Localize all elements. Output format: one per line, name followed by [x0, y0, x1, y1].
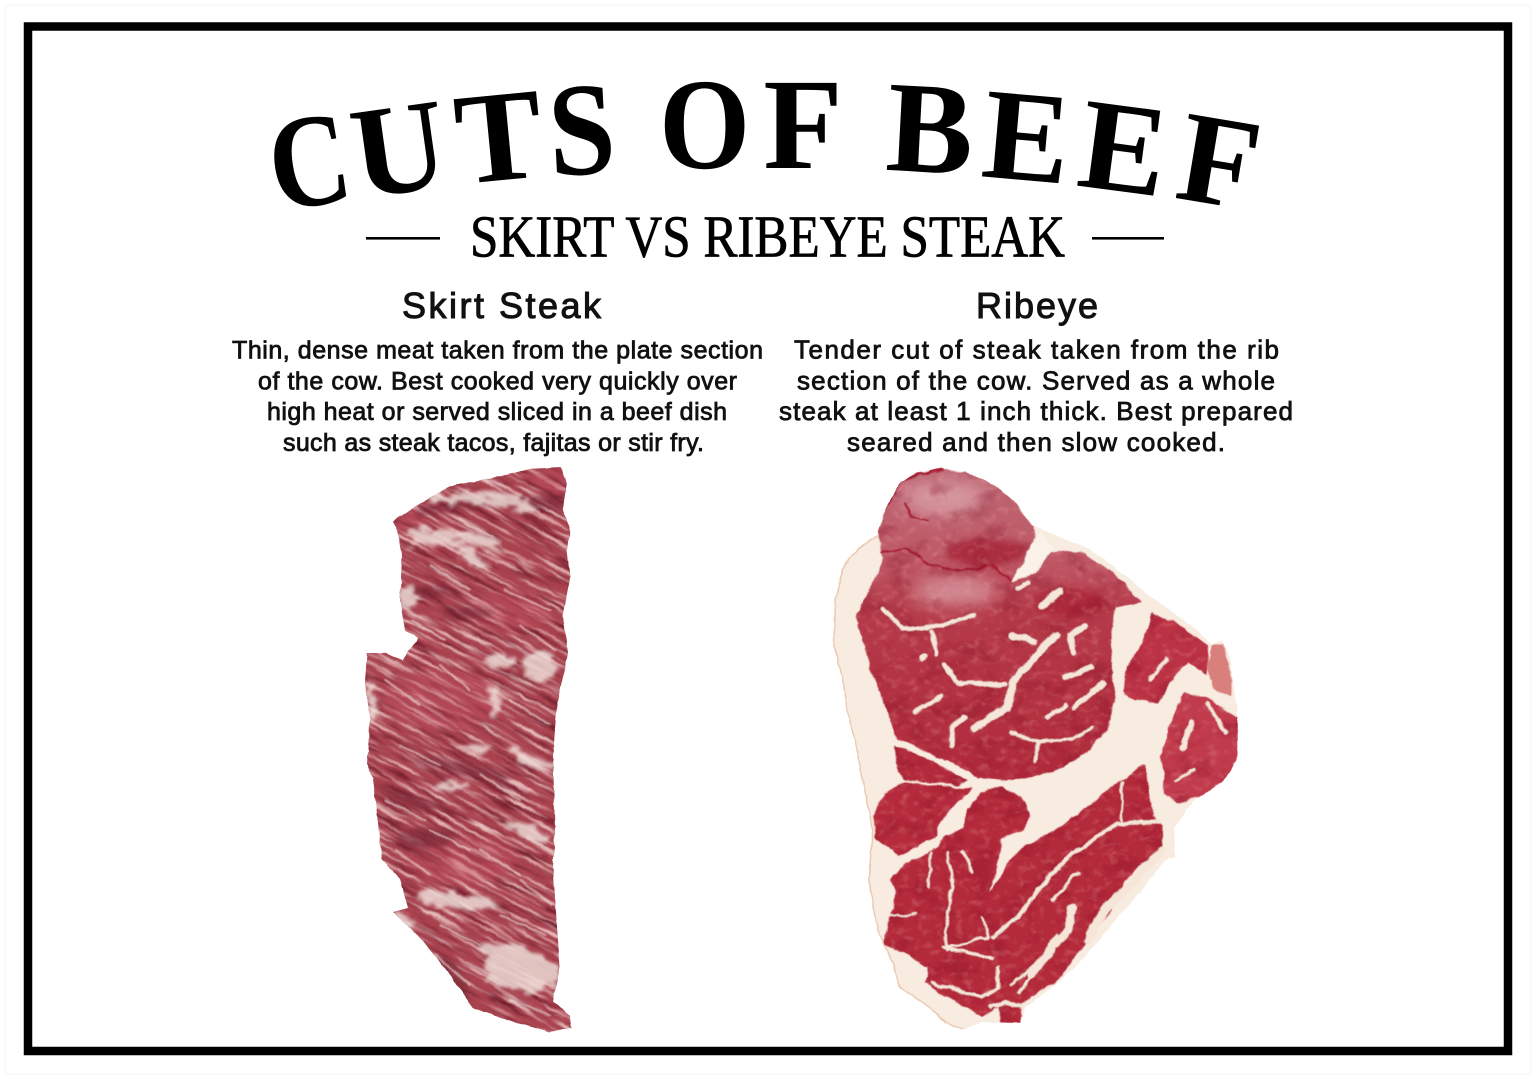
illustration: skirt steak	[365, 467, 572, 1032]
skirt steak description	[232, 336, 763, 457]
outer fat rim tint	[833, 535, 962, 1030]
cut group: muscles and marbling	[855, 468, 1238, 1023]
meat: right lower muscle	[1160, 692, 1238, 803]
ribeye description: section of the cow. Served as a whole	[797, 366, 1275, 396]
sheen on upper eye	[911, 578, 999, 606]
sheen on top lobe	[901, 480, 989, 516]
title: arched Cuts of Beef: T	[449, 61, 549, 213]
ribeye description	[779, 334, 1293, 457]
title: arched Cuts of Beef: O	[658, 52, 751, 197]
title: arched Cuts of Beef: E	[977, 62, 1076, 213]
panel: skirt steak text	[232, 285, 763, 457]
fat marbling	[883, 583, 1225, 1007]
deep red in lobe	[945, 538, 1025, 566]
skirt steak description: of the cow. Best cooked very quickly over	[258, 368, 737, 396]
skirt steak description: such as steak tacos, fajitas or stir fry.	[283, 429, 704, 457]
skirt steak description: high heat or served sliced in a beef dish	[267, 398, 727, 426]
meat: edge nub	[1207, 645, 1232, 695]
panel: ribeye text	[779, 285, 1293, 457]
ribeye description: steak at least 1 inch thick. Best prepared	[779, 396, 1293, 426]
subtitle with side rules: SKIRT VS RIBEYE STEAK	[470, 204, 1065, 270]
meat: lower big muscle with round eye	[885, 765, 1162, 1023]
heading: Ribeye: Ribeye	[976, 285, 1098, 326]
meat: lower left muscle two	[873, 782, 972, 855]
meat: right upper muscle	[1123, 612, 1208, 702]
ribeye description: seared and then slow cooked.	[847, 427, 1225, 457]
heading: Skirt Steak: Skirt Steak	[402, 285, 602, 326]
illustration: ribeye steak	[825, 465, 1245, 1035]
title: arched Cuts of Beef: F	[763, 53, 843, 197]
ribeye description: Tender cut of steak taken from the rib	[794, 334, 1279, 364]
meat: lower left muscle one	[893, 745, 968, 785]
deep red upper right	[1032, 588, 1108, 616]
skirt steak description: Thin, dense meat taken from the plate section	[232, 336, 763, 364]
title: arched Cuts of Beef	[258, 52, 1270, 240]
title: arched Cuts of Beef: S	[545, 55, 619, 205]
title: arched Cuts of Beef: E	[1071, 71, 1176, 225]
fat base	[825, 465, 1245, 1035]
dark red lobe veins	[882, 469, 1012, 582]
title: arched Cuts of Beef: F	[1168, 84, 1270, 239]
title: arched Cuts of Beef: B	[883, 55, 977, 203]
meat: main eye muscle	[855, 468, 1142, 780]
title: arched Cuts of Beef: C	[258, 83, 360, 240]
meat mottling	[856, 469, 1238, 1023]
title: arched Cuts of Beef: U	[343, 72, 456, 227]
fat wedge	[1012, 530, 1053, 583]
